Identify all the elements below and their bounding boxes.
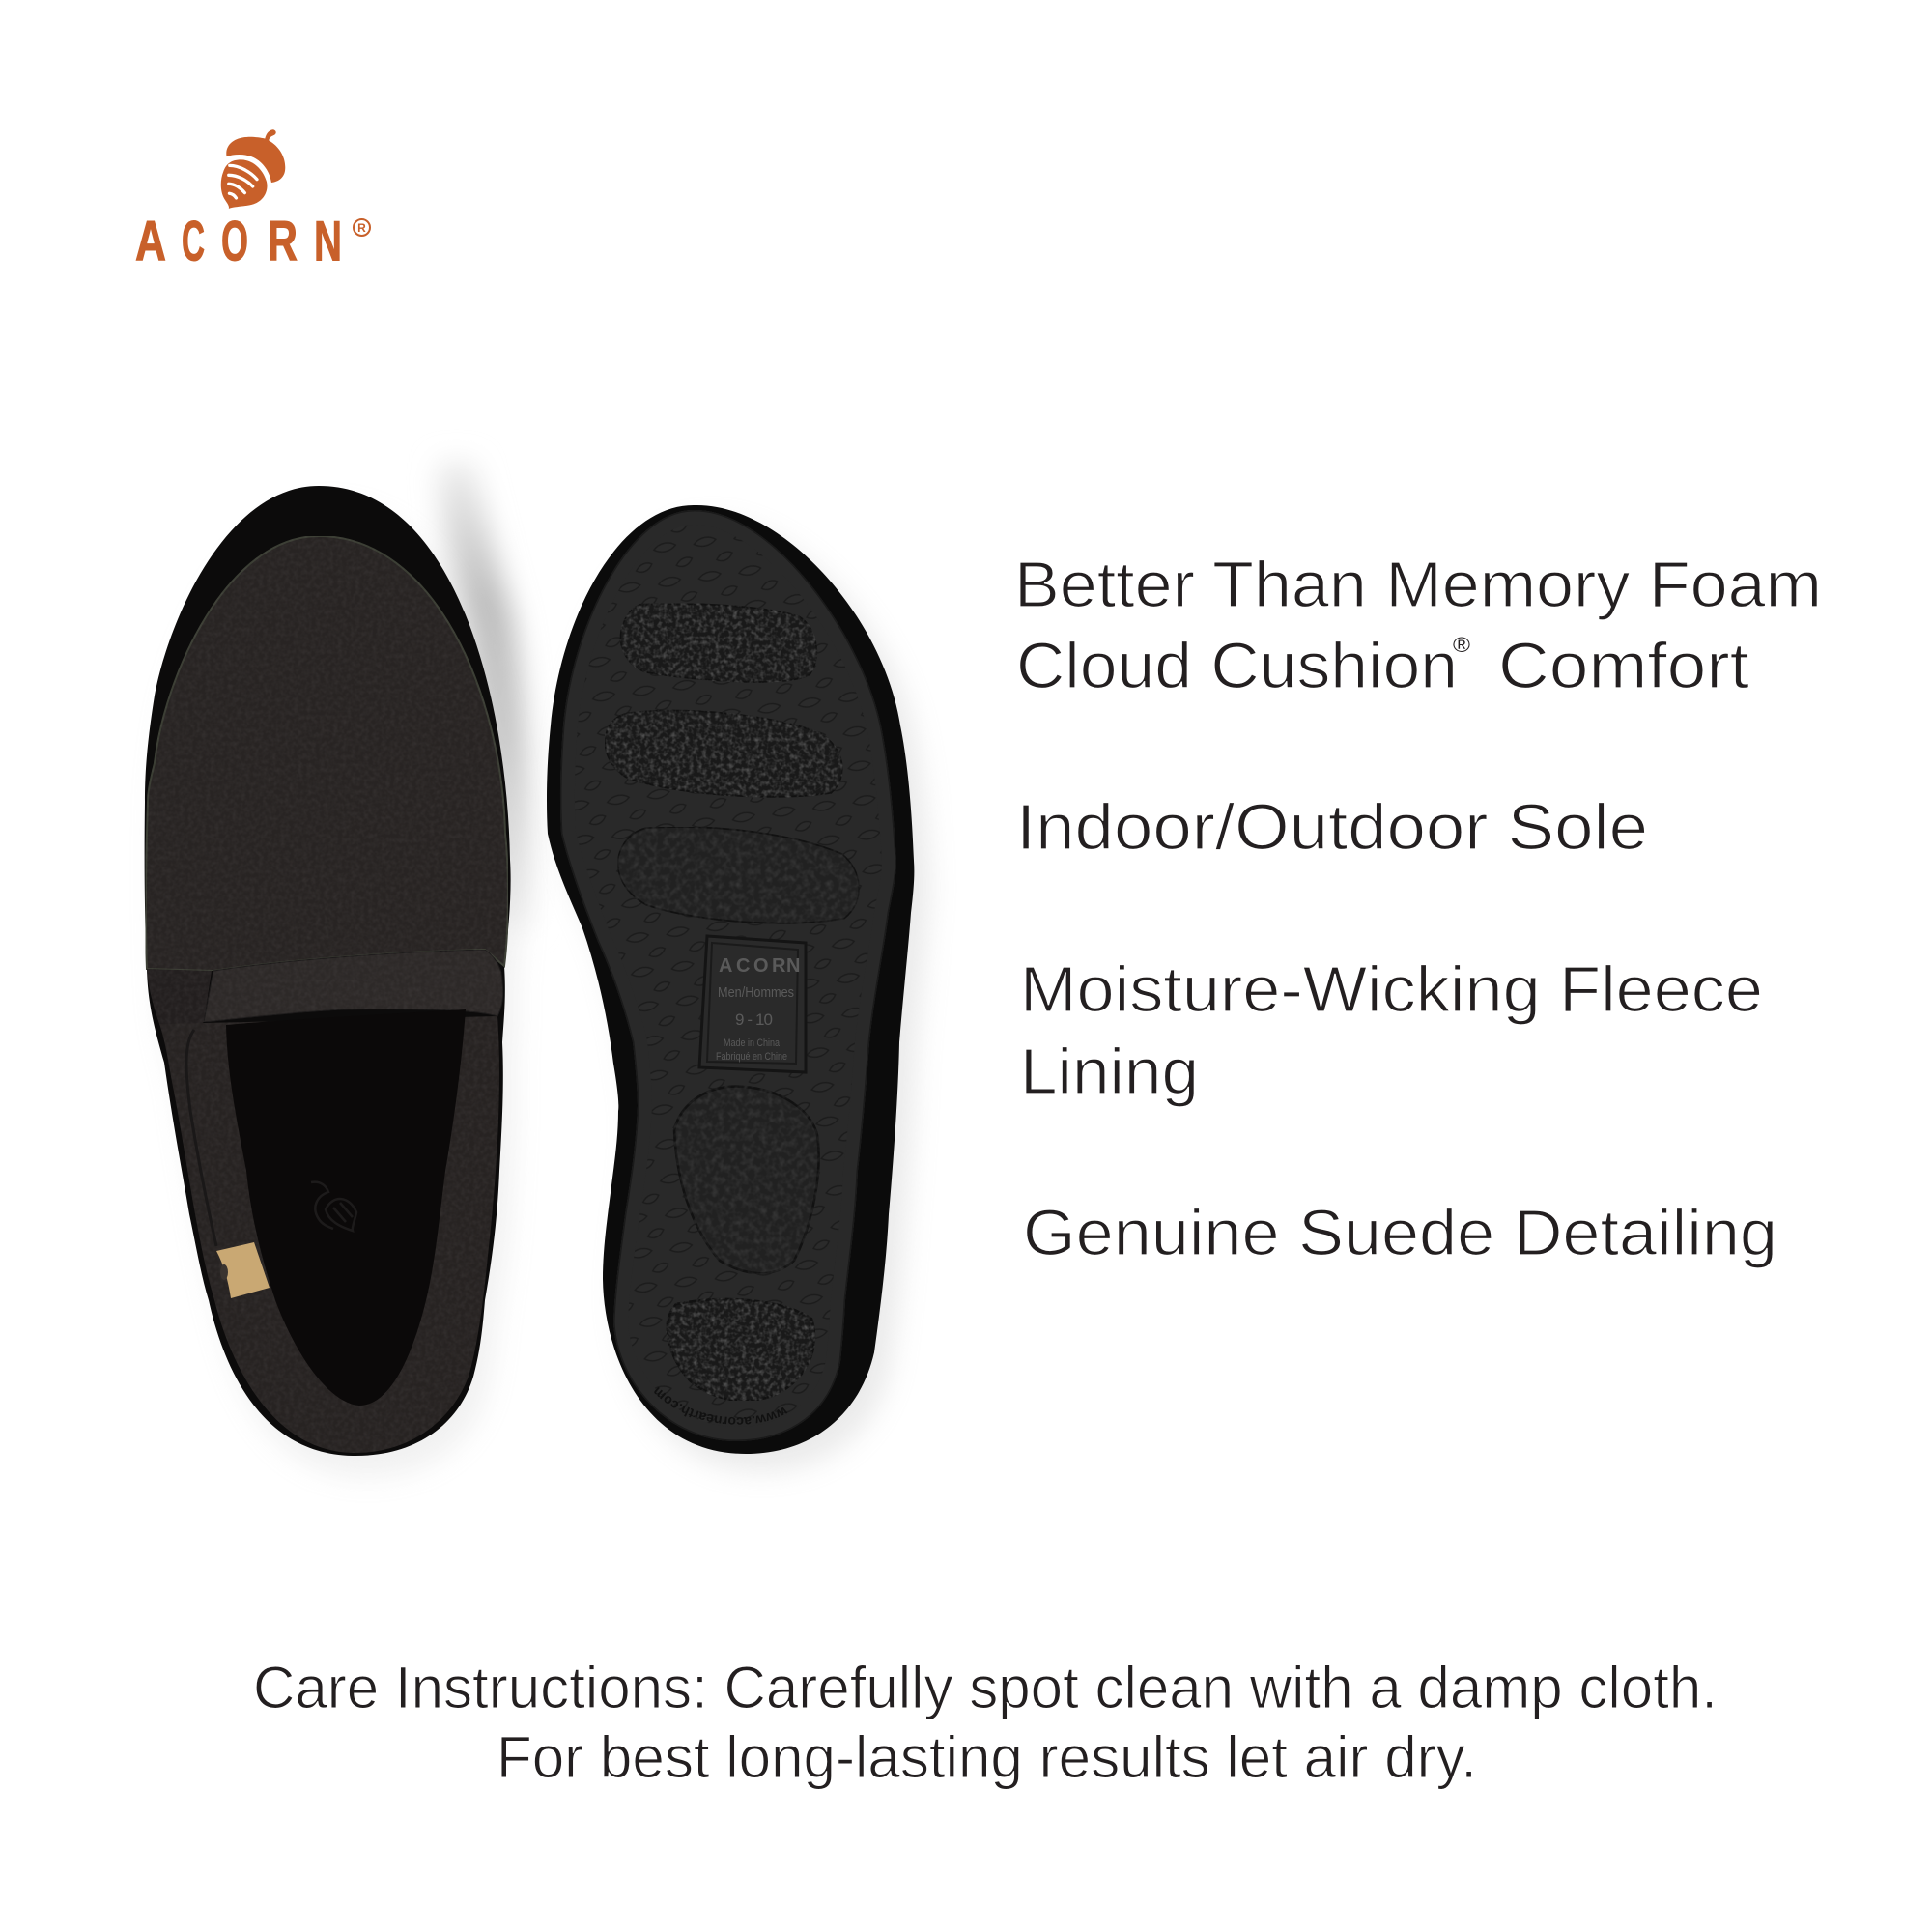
right slipper: sole view — [547, 505, 914, 1454]
infographic canvas — [135, 129, 1817, 1789]
feature: genuine suede: Genuine Suede Detailing — [1023, 1197, 1777, 1269]
size stamp box: 9 - 10 — [735, 1010, 773, 1029]
icon: embossed insole acorn — [311, 1182, 356, 1231]
wordmark: R — [268, 211, 298, 272]
pebbled grip pads — [618, 827, 859, 1273]
size stamp box — [699, 936, 806, 1072]
wordmark — [135, 211, 342, 272]
feature: moisture-wicking lining — [1020, 953, 1763, 1108]
wordmark: A — [135, 211, 166, 272]
tan label — [216, 1242, 270, 1298]
feature: cloud cushion comfort: Comfort — [1498, 630, 1749, 702]
feature: cloud cushion comfort: ® — [1453, 633, 1470, 657]
feature: cloud cushion comfort — [1014, 549, 1822, 702]
wordmark: N — [314, 211, 342, 272]
fleece collar surround — [159, 1016, 499, 1453]
heel website text: www.acornearth.com — [654, 1387, 788, 1425]
feature: cloud cushion comfort: Cloud Cushion — [1016, 630, 1458, 702]
fleece band — [204, 950, 503, 1022]
registered mark: R — [357, 221, 366, 235]
care instructions: Care Instructions: Carefully spot clean with a damp cloth. — [253, 1655, 1718, 1720]
leaf tread pattern — [560, 510, 896, 1441]
care instructions: For best long-lasting results let air dry. — [497, 1724, 1477, 1790]
fleece vamp — [146, 536, 508, 971]
size stamp box: ACORN — [719, 955, 800, 977]
drop shadows behind shoes — [156, 462, 929, 1477]
feature: cloud cushion comfort: Better Than Memory Foam — [1014, 549, 1822, 621]
speckled grip pads — [605, 604, 842, 1401]
label stitch mark — [220, 1264, 228, 1280]
wordmark: O — [221, 211, 248, 272]
insole opening — [226, 1009, 466, 1406]
rubber sole — [560, 510, 896, 1441]
suede edge — [547, 505, 914, 1454]
wordmark: C — [182, 211, 205, 272]
size stamp box: Men/Hommes — [718, 984, 794, 1001]
feature: indoor outdoor sole: Indoor/Outdoor Sole — [1016, 791, 1648, 864]
feature: moisture-wicking lining: Moisture-Wicking Fleece — [1020, 953, 1763, 1026]
suede toe and outsole silhouette — [145, 486, 511, 1456]
icon: acorn — [221, 129, 285, 209]
size stamp box: Made in China — [724, 1037, 781, 1049]
left slipper: top view — [145, 486, 511, 1456]
feature list — [1014, 549, 1822, 1269]
collar side tab — [147, 969, 212, 1029]
registered mark — [354, 219, 370, 236]
inner piping — [186, 1030, 216, 1246]
logo: Acorn — [135, 129, 370, 272]
care instructions — [253, 1655, 1718, 1790]
size stamp box: Fabriqué en Chine — [716, 1051, 787, 1063]
feature: moisture-wicking lining: Lining — [1020, 1036, 1199, 1108]
